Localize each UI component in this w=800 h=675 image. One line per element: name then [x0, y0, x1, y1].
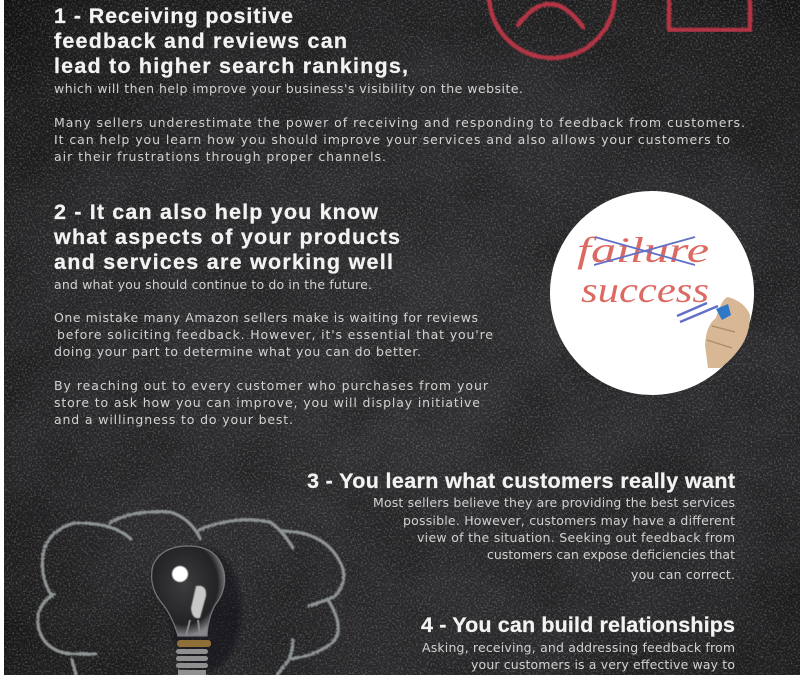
section 2 text: and a willingness to do your best. — [54, 412, 293, 427]
section 4 heading: 4 - You can build relationships — [421, 613, 735, 637]
section 1 text: air their frustrations through proper channels. — [54, 149, 386, 164]
blue underline strokes — [677, 303, 718, 322]
section 2 heading: and services are working well — [54, 250, 393, 274]
illustration: chalk thought cloud — [38, 512, 344, 675]
section 3 heading: 3 - You learn what customers really want — [307, 469, 735, 493]
illustration: light bulb — [152, 546, 241, 675]
section 3 text: Most sellers believe they are providing the best services — [373, 495, 735, 510]
section 3 text — [373, 495, 735, 582]
blue strike-through — [594, 237, 695, 265]
section 1 text: Many sellers underestimate the power of receiving and responding to feedback from customers. — [54, 115, 745, 130]
section 2 text: By reaching out to every customer who purchases from your — [54, 378, 489, 393]
section 1 heading: feedback and reviews can — [54, 29, 347, 53]
section 4 text — [422, 640, 735, 672]
section 3 text: view of the situation. Seeking out feedback from — [417, 530, 735, 545]
section 2 text — [54, 277, 493, 427]
section 4 text: your customers is a very effective way to — [471, 657, 735, 672]
section 2 text: before soliciting feedback. However, it's essential that you're — [57, 327, 493, 342]
section 3 text: you can correct. — [631, 567, 735, 582]
section 2 heading: what aspects of your products — [53, 225, 400, 249]
section 4 text: Asking, receiving, and addressing feedback from — [422, 640, 735, 655]
section 2 text: doing your part to determine what you can do better. — [54, 344, 421, 359]
section 2 heading — [53, 200, 400, 274]
section 1 heading — [54, 4, 408, 78]
section 1 heading: lead to higher search rankings, — [54, 54, 408, 78]
section 2 heading: 2 - It can also help you know — [54, 200, 378, 224]
word: success: success — [581, 270, 709, 310]
section 1 text — [54, 81, 745, 164]
icon: hand holding marker — [705, 297, 750, 368]
section 1 text: It can help you learn how you should improve your services and also allows your customers to — [54, 132, 730, 147]
word: failure: failure — [577, 230, 709, 270]
section 2 text: and what you should continue to do in the future. — [54, 277, 372, 292]
image: failure crossed out, success written on white circle — [550, 191, 754, 395]
section 2 text: store to ask how you can improve, you will display initiative — [54, 395, 480, 410]
section 1 text: which will then help improve your business's visibility on the website. — [54, 81, 523, 96]
icon: sad face in red chalk — [489, 0, 615, 58]
section 1 heading: 1 - Receiving positive — [54, 4, 293, 28]
section 3 text: customers can expose deficiencies that — [487, 547, 735, 562]
section 3 text: possible. However, customers may have a different — [403, 513, 735, 528]
section 2 text: One mistake many Amazon sellers make is waiting for reviews — [54, 310, 478, 325]
icon: red chalk square — [669, 0, 750, 30]
